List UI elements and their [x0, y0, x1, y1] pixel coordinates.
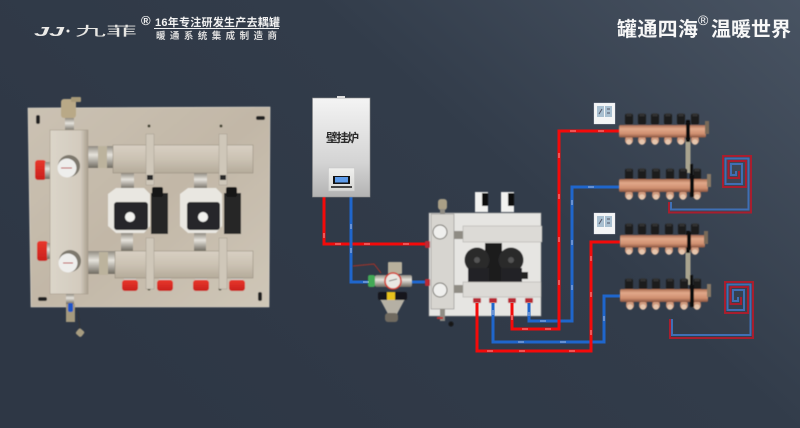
manifold ports — [625, 246, 699, 255]
end valve — [707, 174, 711, 187]
end valve — [704, 231, 708, 244]
manifold actuators — [625, 223, 699, 234]
slogan — [154, 15, 280, 42]
module connectors — [454, 231, 463, 293]
product photo: hydraulic separator panel — [28, 97, 270, 338]
registered mark: ® — [141, 13, 151, 28]
coil return line — [671, 158, 748, 210]
copper bar — [619, 179, 708, 192]
manifold 4 — [620, 278, 711, 310]
thermostat 1 — [594, 103, 615, 124]
copper bar — [620, 289, 708, 302]
logo script mark: JJ — [34, 25, 64, 39]
headline right: 温暖世界 — [711, 18, 791, 41]
module tank — [431, 214, 454, 309]
blue return to manifold 2 — [493, 296, 620, 342]
headline registered mark: ® — [698, 12, 709, 28]
valve gauge — [385, 273, 401, 289]
manifold 3 — [620, 223, 708, 255]
manifold actuators — [625, 278, 701, 290]
outlet caps — [122, 278, 245, 291]
module lower header — [463, 282, 541, 297]
coil return line — [672, 284, 750, 335]
separator tank — [50, 130, 88, 294]
module gauges — [433, 225, 447, 297]
end valve — [705, 121, 709, 134]
dirt separator valve — [353, 262, 412, 322]
coil supply line — [669, 156, 751, 212]
thermostat 2 — [594, 213, 615, 234]
boiler supply pipe — [324, 197, 428, 244]
lower connector — [87, 251, 116, 275]
strainer tip — [385, 313, 398, 322]
blue return to manifold 1 — [529, 187, 620, 321]
pressure gauge bottom — [58, 250, 81, 272]
strap — [690, 285, 694, 307]
pump fittings — [121, 173, 207, 251]
air vent — [61, 97, 81, 131]
bracket upper — [686, 120, 693, 182]
manifold actuators — [625, 168, 701, 180]
brand logo — [34, 13, 151, 39]
mounting plate — [28, 107, 270, 307]
manifold ports — [626, 301, 701, 310]
manifold ports — [625, 191, 701, 200]
magnet band — [378, 292, 407, 300]
upper connector — [87, 146, 114, 168]
strap — [686, 122, 690, 140]
pump 1 — [108, 187, 168, 234]
lower header — [115, 238, 253, 289]
valve body — [375, 275, 412, 287]
manifold 2 — [619, 168, 711, 200]
module pumps — [464, 243, 528, 283]
manifold ports — [625, 136, 699, 145]
manifold actuators — [625, 113, 699, 124]
module upper header — [463, 226, 542, 242]
floor heating coil lower — [670, 282, 753, 338]
upper header — [113, 134, 253, 185]
boiler label: 壁挂炉 — [326, 130, 359, 145]
slogan rule — [154, 28, 279, 29]
slogan line two: 暖通系统集成制造商 — [156, 30, 277, 42]
red caps left — [35, 160, 52, 261]
connecting brackets — [686, 120, 693, 303]
boiler control panel — [328, 168, 354, 191]
slogan line one: 16年专注研发生产去耦罐 — [155, 15, 280, 29]
logo dot — [66, 30, 70, 32]
logo wordmark: 九菲 — [75, 24, 137, 38]
thermostats — [594, 103, 615, 234]
headline left: 罐通四海 — [617, 18, 698, 41]
outlet fittings — [473, 298, 533, 303]
module air vent — [438, 199, 447, 215]
strainer cone — [380, 299, 405, 314]
copper bar — [620, 235, 705, 248]
flow markers — [324, 131, 604, 351]
module drain valve — [437, 309, 454, 326]
red supply to manifold 2 — [477, 242, 620, 351]
copper bar — [619, 125, 706, 138]
bracket lower — [686, 231, 693, 303]
green collar — [368, 275, 375, 287]
wall-hung boiler — [312, 96, 370, 197]
strap — [687, 232, 691, 250]
coil supply line — [670, 282, 753, 338]
floor heating coil upper — [669, 156, 751, 212]
module plate — [429, 213, 541, 316]
strap — [690, 175, 694, 197]
drain valve — [66, 294, 85, 338]
boiler body — [312, 98, 370, 197]
inlet fittings — [425, 241, 430, 286]
boiler return pipe — [351, 197, 428, 282]
valve top stem — [388, 262, 402, 274]
pump controllers — [475, 192, 514, 212]
distribution pipes — [477, 131, 620, 351]
manifold 1 — [619, 113, 709, 145]
pressure gauge top — [58, 155, 80, 178]
pipes: boiler loop — [324, 197, 428, 282]
red supply to manifold 1 — [512, 131, 620, 329]
end valve — [707, 284, 711, 297]
headline — [617, 12, 791, 41]
warning label — [387, 292, 395, 300]
sensor wire — [353, 264, 381, 273]
schematic module — [425, 192, 542, 326]
pump 2 — [180, 187, 241, 234]
